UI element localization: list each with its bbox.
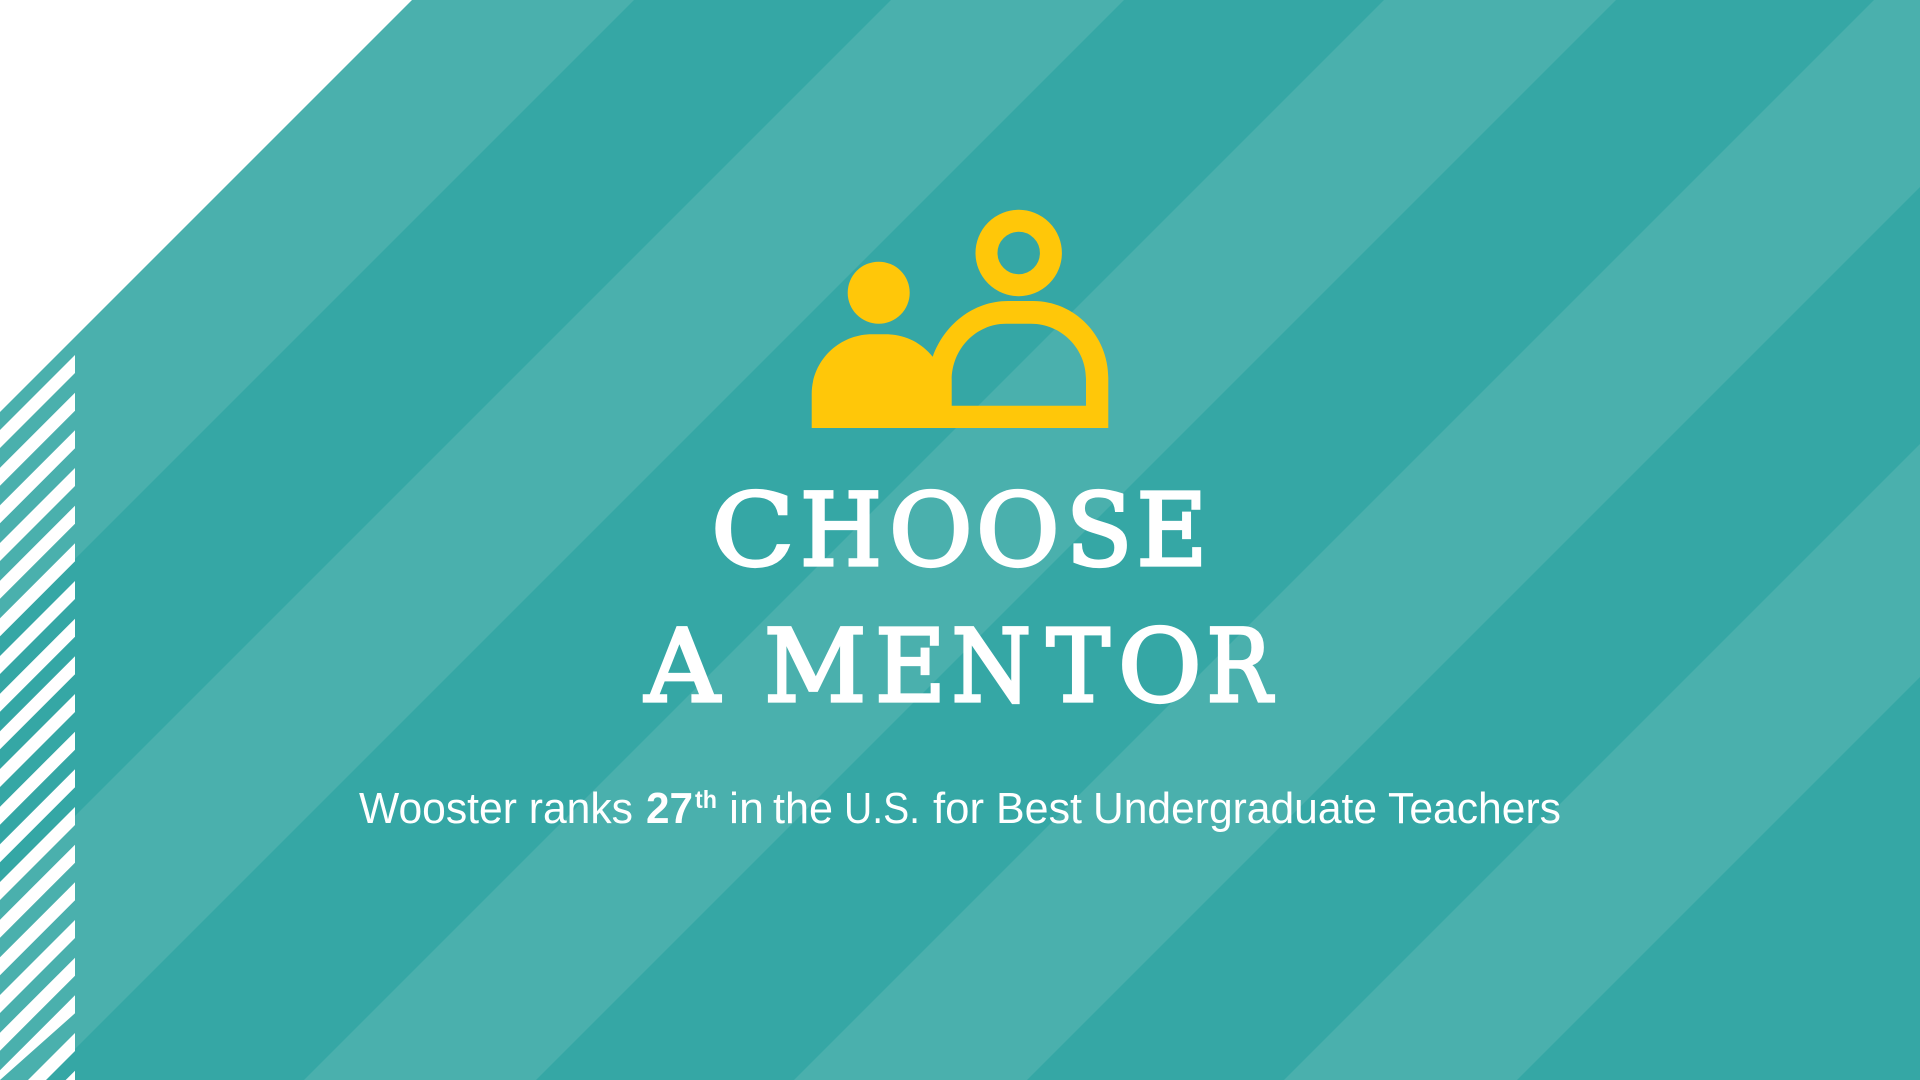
subtitle: ranking statement: Wooster ranks (359, 784, 633, 833)
icon: small person head (848, 262, 910, 324)
ordinal suffix: th (695, 786, 717, 814)
icon: mentor and student (812, 221, 1108, 428)
subtitle: ranking statement (359, 784, 1561, 833)
title line 2: R (1206, 609, 1274, 726)
title line 1: O (889, 472, 973, 589)
title line 1: S (1066, 474, 1132, 589)
subtitle: ranking statement: U.S. (844, 784, 920, 833)
icon: bodies (812, 301, 1108, 428)
subtitle: ranking statement: for (933, 784, 984, 833)
subtitle: ranking statement: Teachers (1388, 784, 1561, 833)
title line 1: C (711, 472, 794, 589)
title line 2 (644, 608, 1274, 726)
title line 1 (711, 472, 1207, 589)
title line 2: O (1118, 608, 1202, 725)
title: Choose a Mentor (644, 472, 1274, 726)
title line 2: M (764, 608, 866, 725)
title line 1: H (800, 472, 882, 589)
title line 2: T (1046, 609, 1110, 726)
title line 1: O (976, 472, 1060, 589)
ranking number: 27 (646, 784, 693, 833)
title line 2: E (875, 610, 946, 725)
subtitle: ranking statement: Undergraduate (1093, 784, 1377, 833)
title line 2: N (952, 608, 1031, 725)
white hatched stripes on left edge (0, 355, 75, 1080)
title line 1: E (1136, 474, 1207, 589)
title line 2: A (644, 608, 721, 725)
subtitle: ranking statement: in (729, 784, 764, 833)
subtitle: ranking statement: the (773, 784, 833, 833)
icon: mentor head ring (986, 221, 1051, 285)
subtitle: ranking statement: Best (996, 784, 1082, 833)
